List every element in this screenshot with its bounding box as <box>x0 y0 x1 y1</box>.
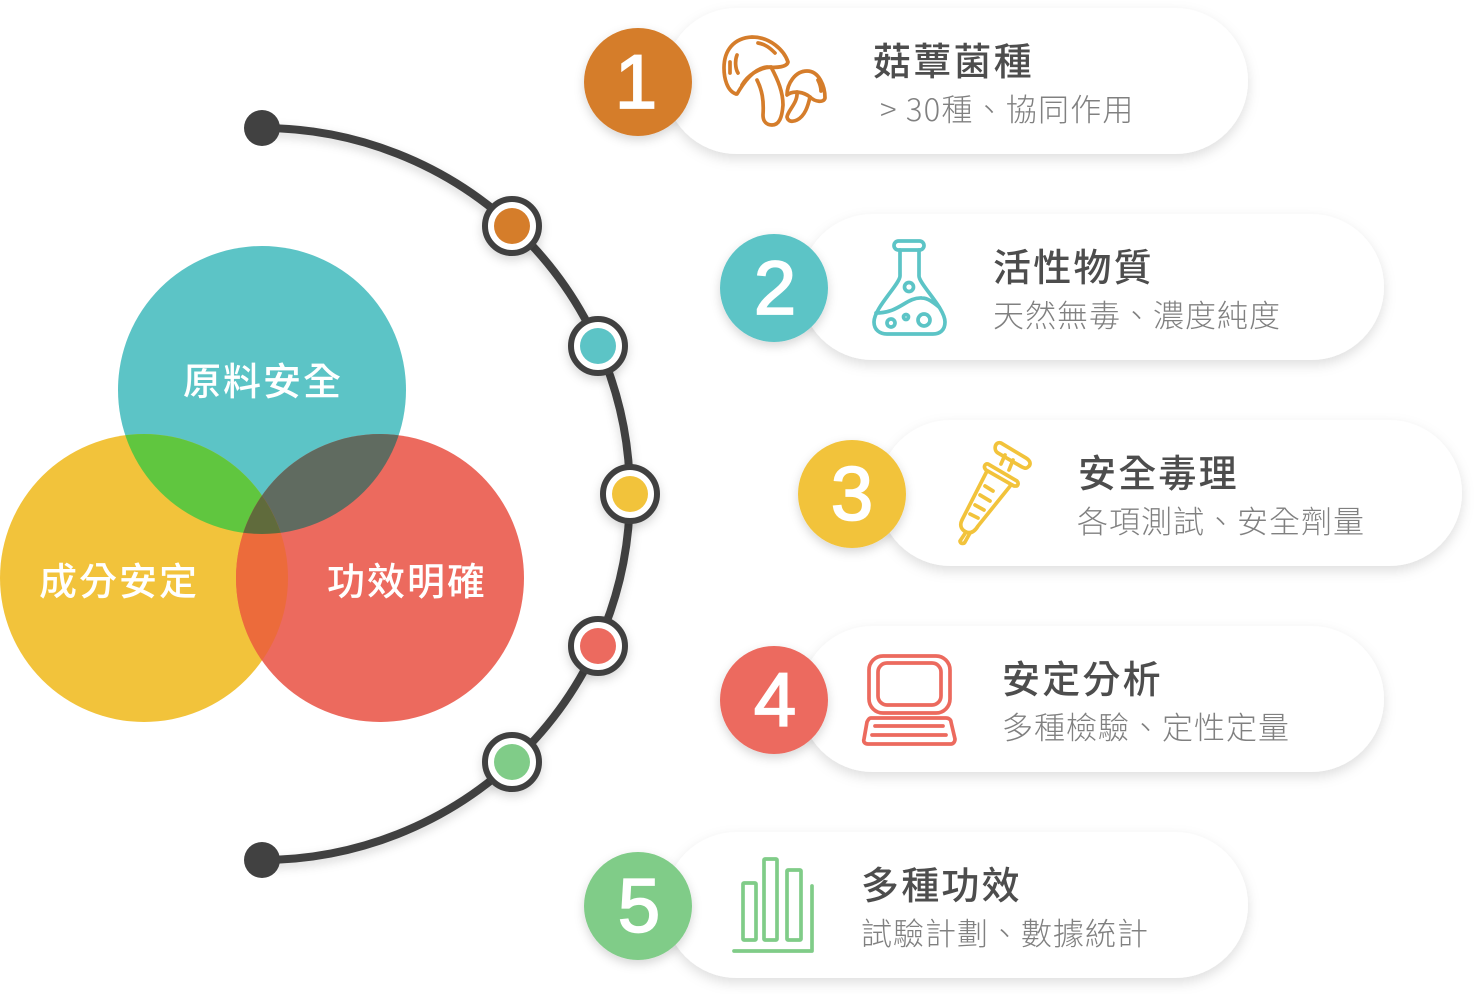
icon: bar chart <box>734 859 812 951</box>
venn circle: teal <box>118 246 406 534</box>
venn diagram <box>0 246 524 722</box>
arc end dot: bottom <box>244 842 280 878</box>
venn label: yellow: 成分安定 <box>39 551 199 606</box>
arc end dot: top <box>244 110 280 146</box>
item 3 <box>798 420 1462 566</box>
subtext 2: 天然無毒、濃度純度 <box>993 291 1281 336</box>
icon: mushrooms <box>724 37 825 125</box>
timeline arc <box>244 110 630 878</box>
item 5 <box>584 832 1248 978</box>
heading 5: 多種功效 <box>861 855 1022 910</box>
subtext 4: 多種檢驗、定性定量 <box>1002 703 1290 748</box>
number badge 2 <box>720 234 828 342</box>
pill 2 <box>800 214 1384 360</box>
heading 3: 安全毒理 <box>1078 443 1239 498</box>
heading 1: 菇蕈菌種 <box>873 31 1034 86</box>
heading 4: 安定分析 <box>1002 649 1163 704</box>
number badge 3: 3 <box>831 452 873 537</box>
item 4 <box>720 626 1384 772</box>
venn label: red: 功效明確 <box>327 551 487 606</box>
venn circle: red <box>236 434 524 722</box>
number badge 1: 1 <box>615 40 657 125</box>
number badge 4: 4 <box>754 658 796 743</box>
item 1 <box>584 8 1248 154</box>
pill 5 <box>664 832 1248 978</box>
timeline node 5 <box>485 735 539 789</box>
number badge 2: 2 <box>754 246 796 331</box>
timeline node 4 <box>571 619 625 673</box>
number badge 3 <box>798 440 906 548</box>
number badge 5: 5 <box>618 864 660 949</box>
pill 4 <box>800 626 1384 772</box>
subtext 5: 試驗計劃、數據統計 <box>861 909 1149 954</box>
icon: syringe <box>960 443 1030 543</box>
item 2 <box>720 214 1384 360</box>
venn label: teal: 原料安全 <box>183 351 343 406</box>
number badge 5 <box>584 852 692 960</box>
icon: flask <box>874 241 945 334</box>
timeline node 3 <box>603 467 657 521</box>
venn circle: yellow <box>0 434 288 722</box>
heading 2: 活性物質 <box>993 237 1154 292</box>
timeline node 2 <box>571 319 625 373</box>
icon: computer <box>864 656 955 744</box>
number badge 1 <box>584 28 692 136</box>
pill 3 <box>878 420 1462 566</box>
pill 1 <box>664 8 1248 154</box>
number badge 4 <box>720 646 828 754</box>
timeline node 1 <box>485 199 539 253</box>
subtext 3: 各項測試、安全劑量 <box>1077 497 1365 542</box>
subtext 1: > 30種、協同作用 <box>880 85 1135 130</box>
